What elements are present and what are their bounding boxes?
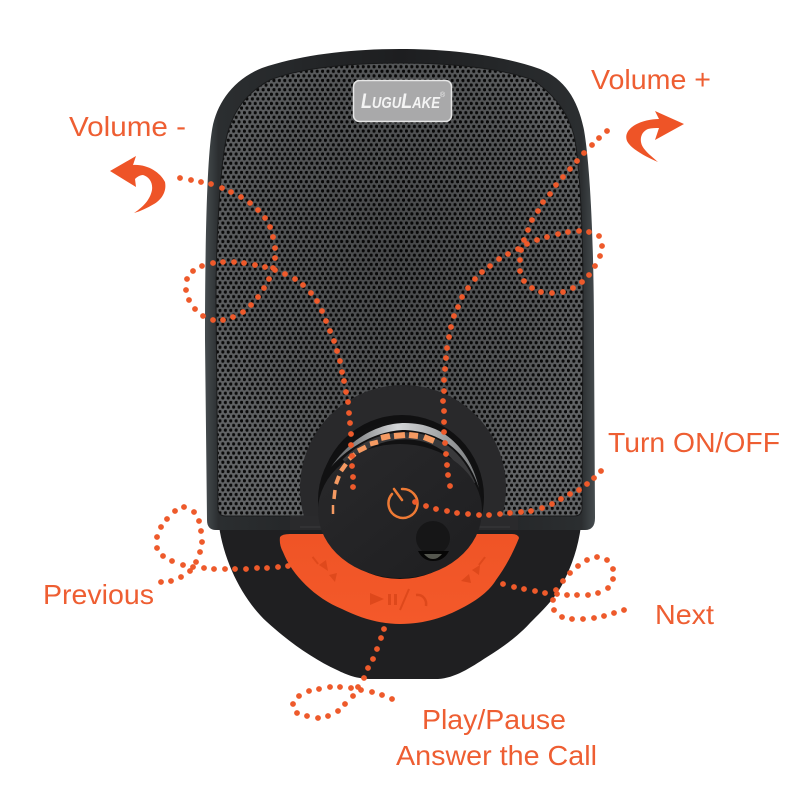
dotted line: power (415, 471, 601, 515)
label: Volume +: Volume + (591, 64, 711, 95)
label: Previous: Previous (43, 579, 154, 610)
dotted line: play pause (293, 629, 392, 718)
speaker frame (205, 49, 595, 530)
logo badge: ® (440, 91, 446, 99)
dotted line: volume plus (443, 131, 607, 486)
speaker grille (216, 63, 583, 516)
label: Turn ON/OFF: Turn ON/OFF (608, 427, 780, 458)
dotted line: previous (157, 507, 288, 582)
play pause answer glyph (370, 589, 426, 610)
icon: power symbol (388, 489, 417, 518)
dotted line: next (503, 557, 624, 619)
logo badge (354, 80, 452, 122)
label: Next: Next (655, 599, 714, 630)
knob indicator lights (333, 435, 434, 514)
label: Answer the Call: Answer the Call (396, 740, 597, 771)
arrow: volume minus (110, 156, 165, 213)
power knob (318, 421, 482, 579)
logo badge: LUGULAKE (361, 90, 441, 113)
label: Play/Pause: Play/Pause (422, 704, 566, 735)
previous button glyph (312, 556, 337, 582)
orange control strip (280, 534, 519, 624)
microphone hole (416, 521, 450, 561)
speaker device (205, 49, 595, 679)
label: Volume -: Volume - (69, 111, 186, 142)
lower base (219, 526, 581, 679)
dotted line: volume minus (180, 178, 353, 487)
knob housing (290, 385, 518, 528)
next button glyph (461, 556, 486, 583)
arrow: volume plus (626, 111, 684, 162)
